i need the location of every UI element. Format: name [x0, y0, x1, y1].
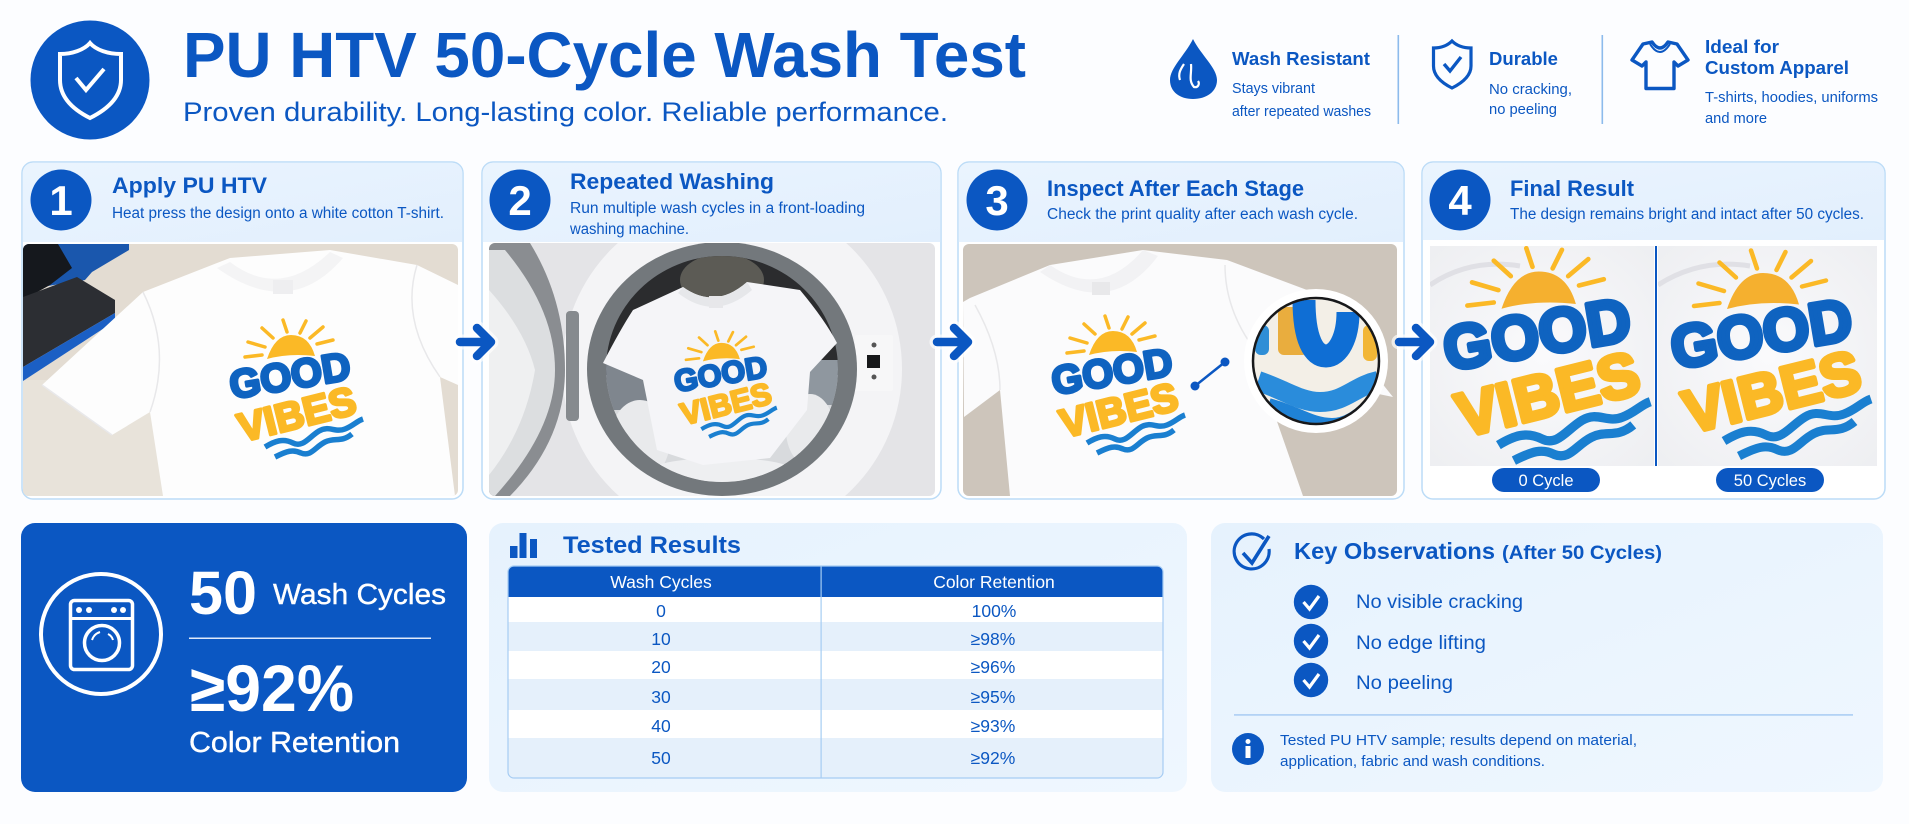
logo: good vibes: GOOD [1438, 285, 1636, 385]
heading: Key Observations [1294, 538, 1495, 564]
label: 50 cycles [1716, 468, 1824, 492]
step number 4: 4 [1448, 177, 1472, 224]
panel: tested results [489, 523, 1187, 792]
photo: shirt next to heat press [23, 244, 458, 496]
panel: step 3 [958, 162, 1404, 499]
feature: wash resistant: after repeated washes [1232, 104, 1371, 120]
logo: good vibes [226, 320, 363, 457]
disclaimer note: application, fabric and wash conditions. [1280, 754, 1545, 770]
table: 40 [651, 716, 671, 736]
observation: no visible cracking: No visible cracking [1356, 591, 1523, 613]
logo: good vibes: GOOD [1048, 340, 1176, 404]
table: ≥92% [971, 748, 1015, 768]
table: 20 [651, 657, 671, 677]
table: 30 [651, 687, 671, 707]
feature: durable [1434, 41, 1572, 118]
table: ≥95% [971, 687, 1015, 707]
panel: step 2 [482, 162, 941, 539]
step number 3: 3 [985, 177, 1009, 224]
stat: color retention [189, 651, 400, 759]
feature: ideal for custom apparel: Ideal for [1705, 37, 1779, 57]
feature: ideal for custom apparel [1632, 37, 1878, 127]
logo: good vibes: VIBES [1449, 339, 1647, 451]
feature: durable: Durable [1489, 49, 1558, 69]
observation: no peeling: No peeling [1356, 672, 1453, 694]
table: Color Retention [933, 572, 1055, 592]
stat: 50 wash cycles [189, 559, 446, 627]
logo: good vibes: VIBES [677, 376, 775, 432]
subtitle: Proven durability. Long-lasting color. Reliable performance. [183, 97, 948, 127]
step number 2 [490, 170, 550, 230]
logo: good vibes: VIBES [1676, 338, 1867, 446]
logo: good vibes: GOOD [671, 349, 770, 399]
photo: inspecting shirt with magnifier [963, 244, 1397, 496]
stat: 50 wash cycles: Wash Cycles [273, 579, 446, 611]
label: 0 cycle: 0 Cycle [1518, 472, 1574, 490]
stat: 50 wash cycles: 50 [189, 559, 257, 627]
feature: wash resistant: Wash Resistant [1232, 49, 1370, 69]
step 2 description: Run multiple wash cycles in a front-loading [570, 200, 865, 217]
table: Wash Cycles [610, 572, 712, 592]
logo: good vibes: GOOD [1666, 286, 1857, 382]
panel: step 4 [1422, 162, 1885, 499]
feature: durable: no peeling [1489, 102, 1557, 118]
disclaimer note [1280, 733, 1637, 770]
icon: water drop [1170, 39, 1217, 99]
icon: shield [1434, 41, 1471, 88]
logo: good vibes [1438, 248, 1650, 461]
feature: ideal for custom apparel: Custom Apparel [1705, 58, 1849, 78]
heading: Tested Results [563, 532, 741, 559]
step number 2: 2 [508, 177, 532, 224]
step number 3 [966, 170, 1028, 230]
table: 50 [651, 748, 671, 768]
table: ≥96% [971, 657, 1015, 677]
logo: good vibes: VIBES [1056, 375, 1183, 447]
step number 4 [1430, 170, 1490, 230]
observation: no edge lifting: No edge lifting [1356, 632, 1486, 654]
step 2 description: washing machine. [569, 221, 689, 238]
feature: durable: No cracking, [1489, 82, 1572, 98]
photo: design at 50 cycles [1658, 246, 1877, 466]
table: ≥93% [971, 716, 1015, 736]
step 4 heading: Final Result [1510, 176, 1634, 201]
arrow: step 3 to 4 [1399, 328, 1430, 356]
stat: color retention: Color Retention [189, 727, 400, 759]
panel: headline stats [21, 523, 467, 792]
stat: color retention: ≥92% [190, 651, 354, 725]
icon: info [1232, 733, 1264, 765]
step 1 description: Heat press the design onto a white cotton T-shirt. [112, 205, 444, 222]
feature: wash resistant [1170, 39, 1371, 120]
label: 0 cycle [1492, 468, 1600, 492]
step 3 heading: Inspect After Each Stage [1047, 176, 1304, 201]
logo: good vibes: GOOD [226, 344, 354, 408]
heading [1294, 538, 1662, 564]
step number 1: 1 [49, 177, 73, 224]
table: 100% [972, 601, 1016, 621]
logo: good vibes [1666, 250, 1871, 456]
feature: wash resistant: Stays vibrant [1232, 81, 1315, 97]
feature: ideal for custom apparel: and more [1705, 111, 1767, 127]
table: 10 [651, 629, 671, 649]
observation: no peeling [1294, 663, 1453, 697]
logo: good vibes: VIBES [234, 379, 361, 451]
step number 1 [30, 170, 92, 230]
feature: ideal for custom apparel: T-shirts, hoodies, uniforms [1705, 90, 1878, 106]
logo: good vibes [1048, 316, 1185, 453]
label: 50 cycles: 50 Cycles [1734, 472, 1806, 490]
table: 0 [656, 601, 666, 621]
disclaimer note: Tested PU HTV sample; results depend on material, [1280, 733, 1637, 749]
observation: no visible cracking [1294, 585, 1523, 619]
step 2 heading: Repeated Washing [570, 169, 774, 194]
title: PU HTV 50-Cycle Wash Test [183, 19, 1026, 91]
icon: t-shirt [1632, 42, 1688, 88]
magnifier inset [1244, 289, 1388, 433]
photo: shirt in washing machine [489, 243, 935, 496]
heading: (After 50 Cycles) [1502, 542, 1662, 564]
connector line [1190, 358, 1230, 390]
arrow: step 2 to 3 [937, 328, 968, 356]
icon: bar chart [510, 533, 537, 558]
icon: washing machine [41, 574, 161, 694]
logo: good vibes [671, 331, 777, 437]
icon: check circle [1234, 534, 1269, 569]
table: ≥98% [971, 629, 1015, 649]
photo: design at 0 cycles [1430, 246, 1654, 466]
table [508, 566, 1163, 778]
panel: key observations [1211, 523, 1883, 792]
panel: step 1 [22, 162, 463, 499]
arrow: step 1 to 2 [460, 328, 491, 356]
step 4 description: The design remains bright and intact after 50 cycles. [1510, 206, 1864, 223]
icon: shield badge [30, 20, 150, 140]
observation: no edge lifting [1294, 624, 1486, 658]
step 2 description [569, 200, 865, 238]
step 1 heading: Apply PU HTV [112, 173, 267, 198]
step 3 description: Check the print quality after each wash cycle. [1047, 206, 1358, 223]
